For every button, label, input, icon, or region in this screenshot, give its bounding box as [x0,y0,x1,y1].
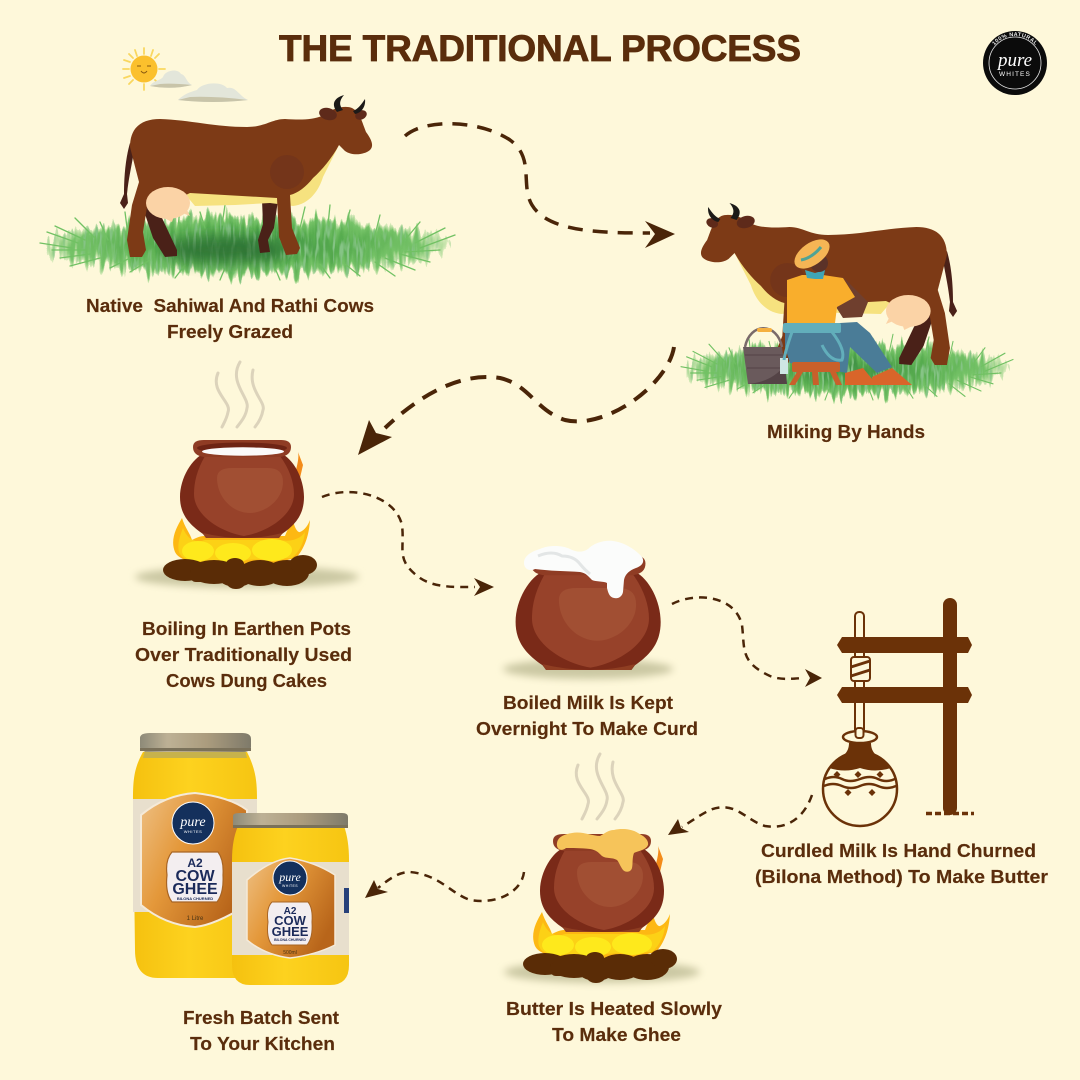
icon: clouds [150,70,248,102]
large jar: 1 Litre [187,916,204,922]
cow facing left [701,203,957,365]
label: step 4: Overnight To Make Curd [476,719,698,739]
steam [576,754,623,819]
cow [120,95,372,257]
illustration: grazing cow on grass [40,95,455,280]
small jar: pure [278,870,301,884]
icon: smiling sun [123,48,165,90]
large jar: GHEE [172,881,218,898]
label: step 6 [506,999,722,1045]
farmer seated on stool [783,234,912,385]
arrow: churn to butter [668,795,812,835]
small jar: WHITES [282,884,298,888]
ground shadow [135,566,359,588]
small jar: COW [274,913,307,928]
logo: pure whites badge [983,31,1047,95]
dung cakes [523,949,677,983]
arrow: cow to milking [405,124,675,248]
small jar: A2 [284,906,297,917]
butter [557,829,648,872]
label: step 4: Boiled Milk Is Kept [503,693,673,713]
illustration: curd pot with foam [503,541,673,679]
large jar: WHITES [184,829,202,834]
logo: pure whites badge: WHITES [999,71,1031,78]
label: step 3: Over Traditionally Used [135,645,352,665]
grass patch [681,332,1013,400]
large jar: pure [179,815,206,830]
pot [516,555,661,670]
small jar: 500ml [283,950,297,956]
clay pot [823,728,897,826]
foam [524,541,643,598]
label: step 5: Curdled Milk Is Hand Churned [761,841,1036,861]
arrow: curd to churn [672,597,822,687]
fire [533,846,670,958]
small jar: GHEE [272,924,309,939]
label: step 7: To Your Kitchen [190,1034,335,1054]
label: step 5: (Bilona Method) To Make Butter [755,867,1048,887]
pot [540,834,664,932]
label: step 6: Butter Is Heated Slowly [506,999,722,1019]
label: step 4 [476,693,698,739]
illustration: boiling in earthen pot [135,362,359,589]
logo: pure whites badge: 100% NATURAL [992,32,1036,46]
pot [180,440,304,538]
ground line [926,812,974,815]
label: step 2: Milking By Hands [767,422,925,442]
illustration: ghee jars [133,733,349,985]
steam [216,362,263,427]
ground shadow [503,659,673,679]
label: step 1: Native Sahiwal And Rathi Cows [86,296,374,316]
logo: pure whites badge: pure [996,50,1032,71]
label: step 6: To Make Ghee [552,1025,681,1045]
illustration: milking by hand [681,203,1013,400]
label: step 7: Fresh Batch Sent [183,1008,339,1028]
fire [173,452,310,564]
churning rod [851,612,870,737]
label: step 3: Cows Dung Cakes [166,671,327,691]
large jar [133,733,257,978]
large jar: A2 [187,856,203,870]
label: step 1: Freely Grazed [167,322,293,342]
grass patch [40,205,455,280]
label: step 1 [86,296,374,342]
label: step 7 [183,1008,339,1054]
illustration: bilona churner [823,598,974,826]
large jar: COW [175,868,215,885]
arrow: butter to jars [365,872,524,901]
small jar: BILONA CHURNED [274,938,306,942]
arrow: milking to boiling [358,347,674,455]
cross bars [837,637,972,703]
small jar [232,813,349,985]
milk bucket [743,328,788,384]
large jar: BILONA CHURNED [177,896,213,901]
label: step 3: Boiling In Earthen Pots [142,619,351,639]
milk [202,447,284,456]
dung cakes [163,555,317,589]
label: step 3 [135,619,352,691]
post [943,598,957,815]
illustration: heating butter pot [504,754,700,983]
title: THE TRADITIONAL PROCESS [279,28,801,69]
arrow: boiling to curd [322,492,494,596]
ground shadow [504,961,700,983]
label: step 5 [755,841,1048,887]
